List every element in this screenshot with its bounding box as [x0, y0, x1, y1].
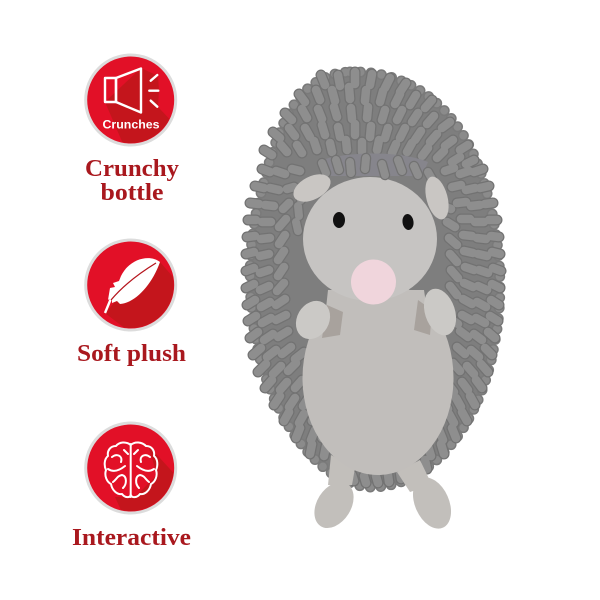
- badge caption: Crunches: [102, 120, 160, 132]
- spiky fur body: [246, 72, 501, 487]
- label: crunchy bottle: [85, 156, 179, 206]
- left ear: [289, 169, 335, 207]
- badge long shadow: [106, 68, 170, 143]
- forehead seam: [322, 154, 428, 176]
- right eye: [401, 213, 415, 231]
- icon: speaker: [105, 68, 158, 112]
- chest shadows: [322, 305, 343, 338]
- right foot: [397, 460, 459, 535]
- left eye: [333, 212, 345, 228]
- icon: brain: [105, 442, 157, 497]
- fringe over head: [296, 158, 432, 231]
- badge: crunchy bottle: [84, 54, 178, 146]
- badge ring: [86, 423, 176, 513]
- label: crunchy bottle: bottle: [100, 180, 164, 206]
- belly: [302, 281, 454, 475]
- label: soft plush: Soft plush: [77, 341, 186, 367]
- left arm: [289, 295, 337, 345]
- left foot: [306, 455, 362, 535]
- hedgehog plush toy: [246, 72, 501, 535]
- badge ring: [86, 240, 176, 330]
- label: crunchy bottle: Crunchy: [85, 156, 179, 182]
- icon: feather: [105, 258, 160, 313]
- badge long shadow: [105, 262, 174, 328]
- chest: [322, 290, 432, 345]
- badge long shadow: [115, 448, 174, 511]
- label: interactive: Interactive: [72, 525, 191, 551]
- right ear: [421, 174, 453, 222]
- badge: interactive: [84, 422, 178, 514]
- head: [303, 177, 437, 301]
- nose: [351, 260, 396, 304]
- right arm: [418, 285, 462, 339]
- badge: soft plush: [86, 240, 180, 340]
- badge ring: [86, 55, 176, 145]
